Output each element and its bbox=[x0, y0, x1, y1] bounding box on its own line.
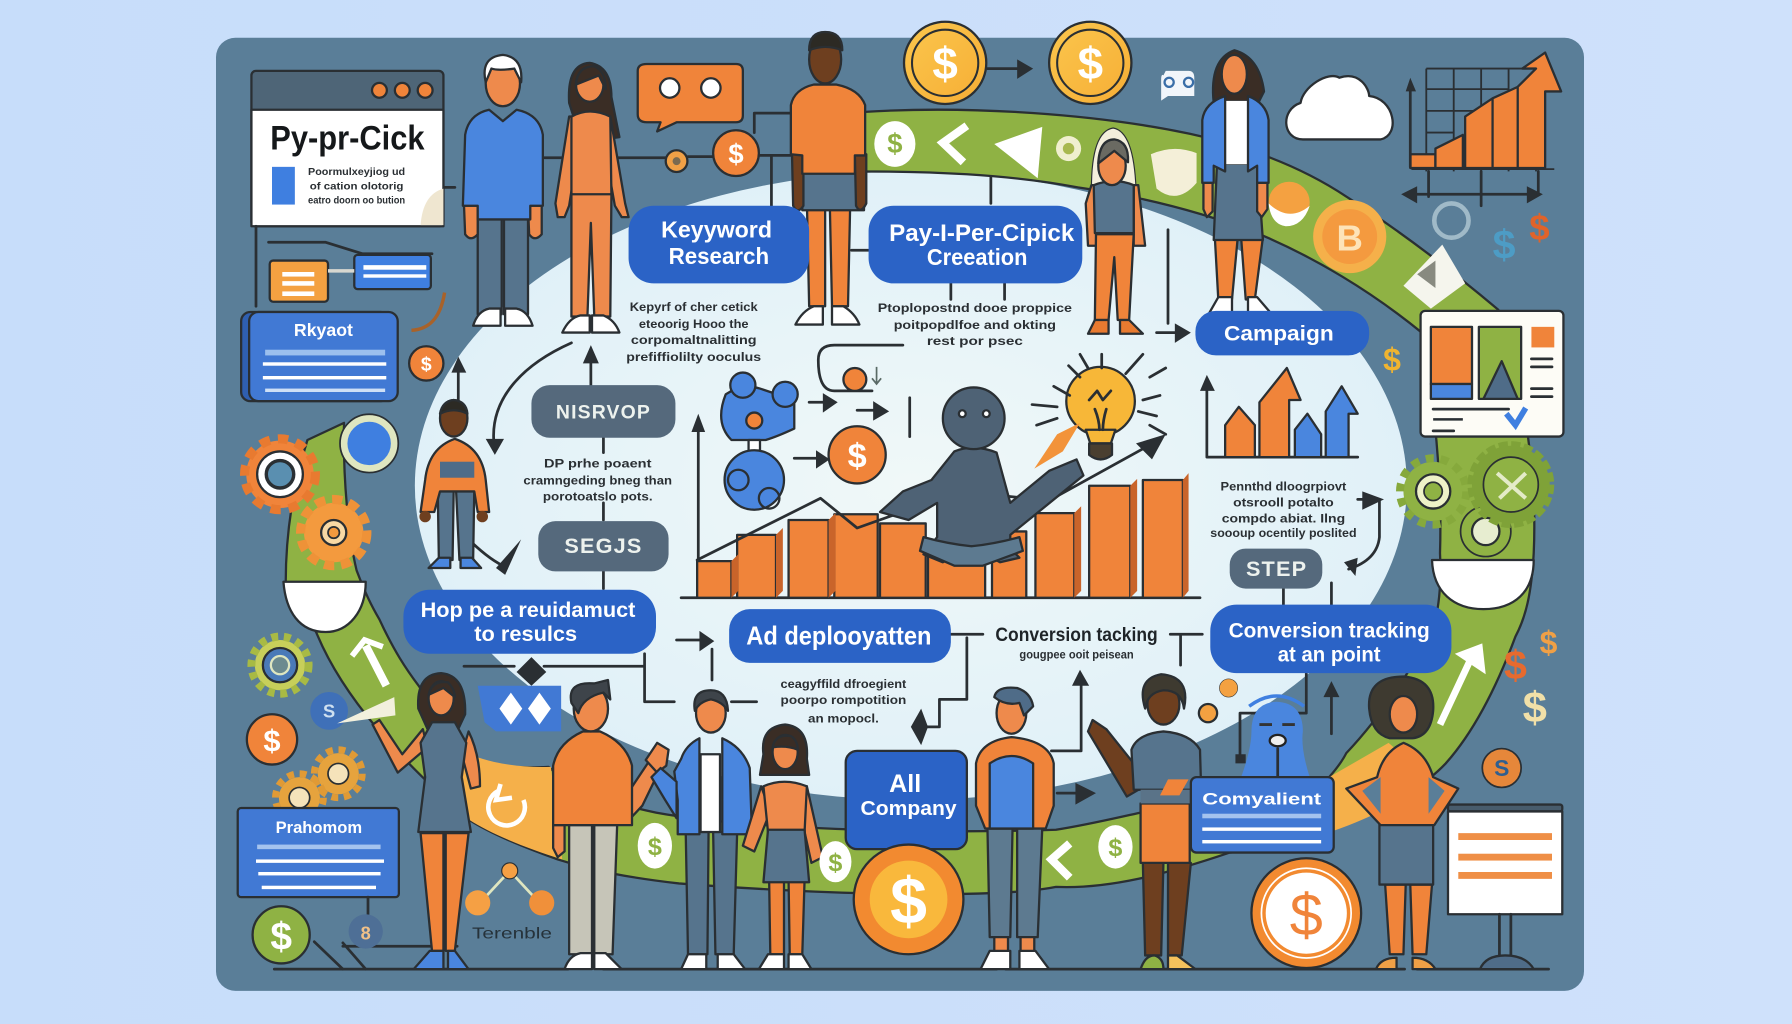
decorative dollar signs upper right bbox=[1383, 203, 1550, 377]
person: man in blue sweater bbox=[463, 55, 543, 326]
window description: eatro doorn oo bution bbox=[308, 195, 405, 206]
text: creation description: poitpopdlfoe and okting bbox=[894, 318, 1056, 332]
green curved process band bbox=[286, 110, 1534, 894]
green coin with stand: 8 bbox=[361, 922, 371, 943]
trend line arrow bbox=[697, 434, 1166, 560]
coins centre: $ bbox=[848, 437, 867, 475]
icons on top of band: B bbox=[1337, 217, 1363, 258]
bar chart bbox=[681, 434, 1200, 598]
text: right description: soooup ocentily poslited bbox=[1210, 526, 1357, 540]
ring dollar coin bbox=[1251, 858, 1361, 968]
blue swatch bbox=[272, 167, 295, 205]
mini arrow chart bbox=[1200, 368, 1358, 457]
yellow gears lower left bbox=[275, 750, 362, 822]
decorative dollars lower right: $ bbox=[1523, 684, 1547, 732]
pill: Keyword Research: Keyyword bbox=[661, 217, 772, 243]
pill: STEP bbox=[1230, 549, 1322, 589]
pill: Ad deployatten bbox=[729, 609, 951, 663]
decorative dollars lower right: $ bbox=[1540, 625, 1558, 661]
blue diamond card bbox=[478, 686, 561, 731]
green coin with stand: $ bbox=[270, 916, 292, 959]
light central oval bbox=[415, 171, 1407, 800]
pill: Keyword Research: Research bbox=[669, 243, 769, 269]
window title text: Py-pr-Cick bbox=[270, 120, 425, 158]
green band dollar icons: $ bbox=[1108, 834, 1122, 862]
text: creation description: Ptoplopostnd dooe proppice bbox=[878, 301, 1072, 315]
pill: Keyword Research bbox=[629, 206, 809, 283]
green band dollar icons: $ bbox=[828, 849, 842, 877]
coin left small: $ bbox=[421, 353, 432, 375]
person: man orange shirt dark skin bbox=[791, 32, 866, 325]
speech bubble bbox=[638, 64, 743, 131]
whiteboard lower right bbox=[1448, 805, 1562, 969]
pill: Conversion tracking at an point: Conversion tracking bbox=[1229, 618, 1430, 643]
person: man blue jacket bbox=[651, 690, 752, 969]
text: right description: compdo abiat. Ilng bbox=[1222, 511, 1345, 525]
gears left bbox=[245, 414, 398, 566]
top yellow coins: $ bbox=[932, 38, 958, 89]
decorative dollars lower right: $ bbox=[1504, 642, 1527, 688]
green band dollar icons: $ bbox=[648, 833, 662, 861]
text: creation description: rest por psec bbox=[927, 334, 1023, 348]
swirl coin and spray bbox=[309, 690, 395, 731]
blue molecule icon bbox=[721, 373, 798, 510]
window description: Poormulxeyjiog ud bbox=[308, 167, 405, 178]
cloud bbox=[1286, 76, 1393, 139]
coin left small bbox=[409, 346, 443, 381]
orange band segment right bbox=[1211, 743, 1431, 853]
text: NISRVOP description: porotoatslo pots. bbox=[543, 490, 653, 504]
pill: STEP: STEP bbox=[1246, 556, 1307, 581]
lightbulb with rays bbox=[1032, 354, 1166, 469]
pill: Pay-Per-Cpick Creation: Pay-I-Per-Cipick bbox=[889, 220, 1075, 247]
pill: SEGJS bbox=[538, 521, 669, 571]
coin left orange: $ bbox=[263, 723, 281, 758]
pill: Conversion tracking at an point: at an point bbox=[1278, 642, 1381, 667]
top yellow coins: $ bbox=[1078, 38, 1103, 89]
text: creation description bbox=[878, 301, 1072, 348]
text: NISRVOP description: DP prhe poaent bbox=[544, 456, 651, 470]
card: Prahomom: Prahomom bbox=[276, 818, 362, 837]
pill: Hop pe a reuidamuct to resulcs bbox=[403, 590, 656, 654]
top yellow coins bbox=[904, 22, 1131, 104]
green gear left lower bbox=[251, 637, 309, 694]
green coin with stand bbox=[253, 897, 457, 969]
person: woman in dark dress bbox=[373, 673, 480, 969]
coin left orange bbox=[247, 714, 297, 765]
ground lines bbox=[274, 968, 1549, 970]
pill: Pay-Per-Cpick Creation: Creeation bbox=[927, 244, 1027, 270]
text: NISRVOP description bbox=[523, 456, 672, 504]
connectors and arrows bbox=[442, 113, 1384, 805]
text: ad description bbox=[781, 677, 906, 725]
growth chart top right bbox=[1401, 53, 1561, 206]
card: Rkyaot bbox=[241, 312, 398, 401]
person: man orange shirt light trousers bbox=[553, 680, 669, 969]
text: ad description: ceagyffild dfroegient bbox=[781, 677, 906, 691]
ring dollar coin: $ bbox=[1290, 881, 1323, 948]
blue hooded figure bbox=[1241, 696, 1310, 777]
text: keyword description: prefiffiolilty ooculus bbox=[626, 350, 761, 364]
card: Comparison: Comyalient bbox=[1202, 790, 1322, 809]
pill: Pay-Per-Cpick Creation bbox=[869, 206, 1082, 283]
main panel bbox=[216, 38, 1584, 991]
coins centre bbox=[829, 368, 886, 483]
small floating coins bbox=[1199, 679, 1238, 722]
seated figure bbox=[880, 387, 1083, 566]
swirl coin and spray: S bbox=[323, 701, 335, 722]
box: All Company: Company bbox=[861, 797, 957, 820]
big orange dollar coin bbox=[854, 845, 963, 954]
label: Conversion tracking: gougpee ooit peisean bbox=[1019, 647, 1134, 661]
decorative dollars lower right: S bbox=[1494, 755, 1509, 781]
decorative dollars lower right bbox=[1482, 625, 1558, 787]
text: right description bbox=[1210, 479, 1357, 540]
pill: Campaign bbox=[1195, 311, 1369, 355]
box: All Company bbox=[846, 751, 967, 849]
text: right description: Pennthd dloogrpiovt bbox=[1221, 479, 1346, 493]
text: ad description: poorpo rompotition bbox=[781, 693, 906, 707]
triangle network bbox=[465, 863, 554, 942]
green band dollar icons bbox=[488, 784, 1133, 882]
person: small man left bbox=[419, 400, 489, 568]
small linked cards bbox=[269, 242, 445, 330]
person: woman blue blazer bbox=[1202, 50, 1271, 313]
decorative dollar signs upper right: $ bbox=[1529, 207, 1550, 248]
small chain coins bbox=[666, 130, 759, 176]
window description bbox=[308, 167, 405, 206]
icons on top of band bbox=[874, 121, 1465, 309]
small chain coins: $ bbox=[728, 138, 744, 169]
dashboard card right bbox=[1421, 311, 1563, 437]
pill: NISRVOP bbox=[531, 385, 675, 438]
label: Conversion tracking bbox=[995, 624, 1158, 661]
orange band segment left bbox=[434, 749, 562, 859]
label: Conversion tracking: Conversion tacking bbox=[995, 624, 1158, 646]
small speech bubble top right bbox=[1161, 71, 1194, 101]
box: All Company: All bbox=[889, 770, 921, 798]
white bowl left bbox=[283, 582, 366, 632]
text: keyword description: eteoorig Hooo the bbox=[639, 317, 749, 331]
person: man blue and orange top bbox=[976, 688, 1054, 969]
browser window with title bbox=[251, 71, 443, 306]
person: woman in orange bbox=[555, 63, 629, 333]
person: woman in orange top bbox=[743, 725, 823, 969]
white bowl right bbox=[1432, 560, 1534, 609]
magnifier ring bbox=[340, 414, 398, 473]
text: keyword description: Kepyrf of cher cetick bbox=[630, 300, 758, 314]
pill: NISRVOP: NISRVOP bbox=[556, 401, 651, 423]
pill: Hop pe a reuidamuct to resulcs: to resulcs bbox=[474, 621, 577, 646]
icons on top of band: $ bbox=[887, 128, 902, 159]
text: right description: otsrooll potalto bbox=[1233, 495, 1334, 509]
card: Rkyaot: Rkyaot bbox=[294, 320, 353, 340]
text: keyword description: corpomaltnalitting bbox=[631, 333, 757, 347]
pill: Campaign: Campaign bbox=[1224, 321, 1334, 346]
big orange dollar coin: $ bbox=[890, 864, 927, 938]
text: ad description: an mopocl. bbox=[808, 711, 879, 725]
person: curly woman orange shirt bbox=[1346, 677, 1458, 969]
decorative dollar signs upper right: $ bbox=[1493, 221, 1516, 267]
white arrow on band left bbox=[352, 640, 386, 686]
white arrow right band bbox=[1440, 643, 1486, 725]
person: woman grey tee orange skirt bbox=[1088, 674, 1201, 969]
text: keyword description bbox=[626, 300, 761, 364]
pill: Hop pe a reuidamuct to resulcs: Hop pe a reuidamuct bbox=[421, 597, 635, 622]
pill: Ad deployatten: Ad deplooyatten bbox=[746, 621, 931, 651]
card: Comparison bbox=[1191, 777, 1334, 853]
window description: of cation olotorig bbox=[310, 182, 403, 193]
gears right bbox=[1400, 445, 1551, 557]
pill: Conversion tracking at an point bbox=[1210, 605, 1451, 673]
pill: SEGJS: SEGJS bbox=[564, 533, 642, 558]
decorative dollar signs upper right: $ bbox=[1383, 341, 1401, 377]
window control dots bbox=[372, 83, 433, 98]
text: NISRVOP description: cramngeding bneg than bbox=[523, 474, 672, 488]
network label: Terenble bbox=[472, 925, 552, 942]
card: Prahomom bbox=[238, 808, 399, 897]
person: woman grey vest bbox=[1086, 128, 1145, 334]
